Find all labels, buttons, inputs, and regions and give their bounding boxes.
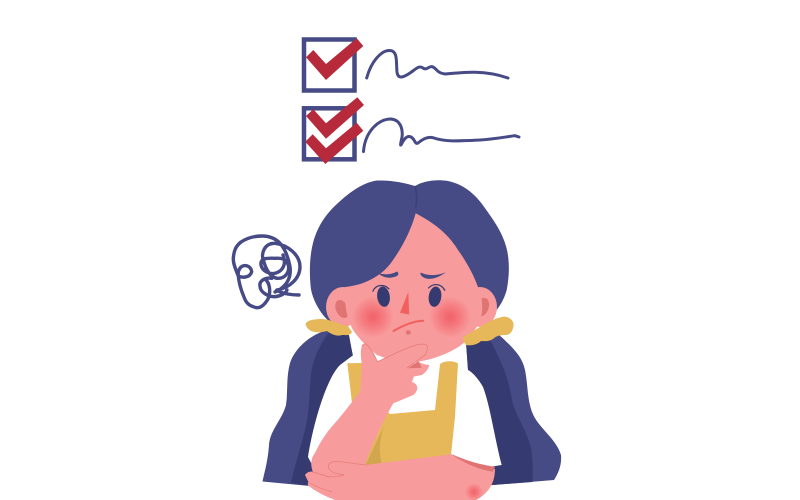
eyebrows: [378, 272, 446, 279]
raised forearm and elbow: [311, 388, 393, 482]
right pigtail: [466, 333, 561, 486]
scribble line one: [367, 50, 508, 78]
girl: [262, 180, 561, 500]
chin mark: [406, 330, 411, 335]
sleeve shadow on arm: [452, 454, 495, 472]
elbow blush: [465, 483, 483, 500]
mouth: [394, 321, 423, 331]
hand with finger on chin: [360, 344, 427, 420]
yellow apron: [347, 361, 458, 468]
checkbox two: [304, 97, 364, 164]
left pigtail: [262, 330, 354, 486]
checkbox one: [304, 38, 363, 90]
neck and collar: [404, 362, 429, 377]
lower folded arm: [305, 454, 495, 500]
blush right: [429, 296, 471, 338]
blush left: [352, 296, 394, 338]
scrunchie right: [463, 317, 514, 345]
eyes: [373, 285, 445, 308]
white shirt: [308, 350, 502, 480]
nose: [400, 292, 409, 314]
scrunchie left: [306, 319, 352, 336]
hair parting: [415, 186, 417, 208]
face: [345, 213, 482, 362]
checklist: [304, 38, 519, 164]
ear left: [326, 287, 360, 327]
scribble line two: [364, 119, 519, 152]
neck shadow: [408, 361, 422, 368]
hair back: [310, 180, 509, 322]
ear right: [463, 287, 497, 327]
tangled thought scribble: [233, 236, 300, 308]
finger creases: [310, 462, 367, 492]
